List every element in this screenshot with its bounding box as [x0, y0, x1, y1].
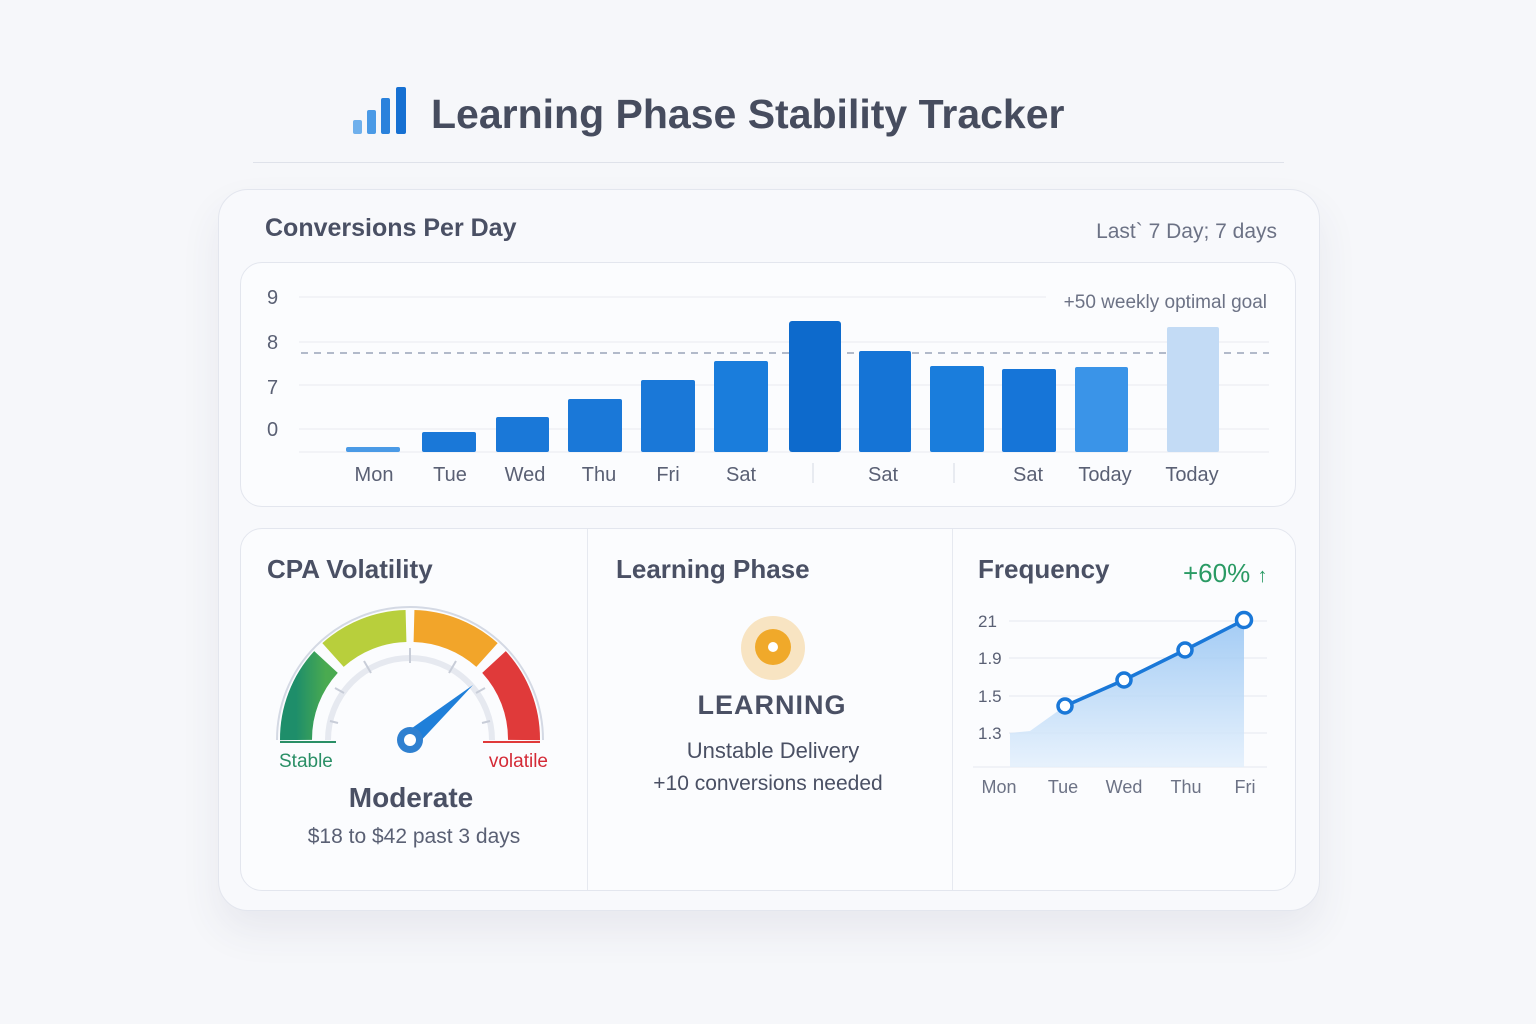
- bar chart panel: Today: [1078, 464, 1132, 486]
- date range: Last` 7 Day; 7 days: [1096, 220, 1277, 243]
- bar chart panel: Wed: [505, 464, 545, 486]
- bar chart panel: Mon: [355, 464, 393, 486]
- bar chart panel: 7: [267, 377, 278, 399]
- icon: bars: [353, 87, 406, 134]
- bars: [346, 321, 1219, 452]
- bar chart panel: +50 weekly optimal goal: [1064, 292, 1267, 313]
- heading: conversions: Conversions Per Day: [265, 214, 516, 242]
- change: +60% ↑: [1183, 558, 1267, 588]
- main panel: [218, 189, 1320, 911]
- bar chart panel: [240, 262, 1296, 507]
- text: range: $18 to $42 past 3 days: [308, 825, 520, 848]
- bar chart panel: 8: [267, 332, 278, 354]
- line chart: Thu: [1170, 777, 1202, 797]
- line chart: 21: [978, 612, 997, 631]
- gauge: [276, 606, 548, 772]
- gauge: volatile: [489, 751, 548, 772]
- line chart: Fri: [1234, 777, 1256, 797]
- gauge: Stable: [279, 751, 333, 772]
- bar chart panel: Fri: [656, 464, 680, 486]
- title: Learning Phase Stability Tracker: [431, 91, 1064, 137]
- bar chart panel: Today: [1165, 464, 1219, 486]
- bar chart panel: Tue: [433, 464, 467, 486]
- line chart: 1.3: [978, 724, 1002, 743]
- bar chart panel: Sat: [868, 464, 898, 486]
- line chart: 1.9: [978, 649, 1002, 668]
- text: delivery: Unstable Delivery: [687, 738, 859, 763]
- needle: [405, 685, 473, 746]
- panel: learning phase: +10 conversions needed: [653, 772, 883, 795]
- panel: frequency: [973, 554, 1267, 797]
- status: LEARNING: [698, 690, 846, 720]
- panel: CPA volatility: [267, 554, 548, 848]
- line chart: Mon: [981, 777, 1017, 797]
- bar chart panel: Sat: [1013, 464, 1043, 486]
- heading: CPA Volatility: [267, 554, 433, 584]
- heading: Learning Phase: [616, 554, 810, 584]
- line chart: Wed: [1106, 777, 1142, 797]
- panel: learning phase: [616, 554, 883, 795]
- line chart: Tue: [1048, 777, 1078, 797]
- line chart: 1.5: [978, 687, 1002, 706]
- heading: Frequency: [978, 554, 1110, 584]
- bar chart panel: Sat: [726, 464, 756, 486]
- bar chart panel: 0: [267, 419, 278, 441]
- bar chart panel: Thu: [582, 464, 616, 486]
- label: moderate: Moderate: [349, 782, 473, 813]
- lower panel: [240, 528, 1296, 891]
- icon: status dot: [741, 616, 805, 680]
- line chart: [973, 610, 1267, 797]
- bar chart panel: 9: [267, 287, 278, 309]
